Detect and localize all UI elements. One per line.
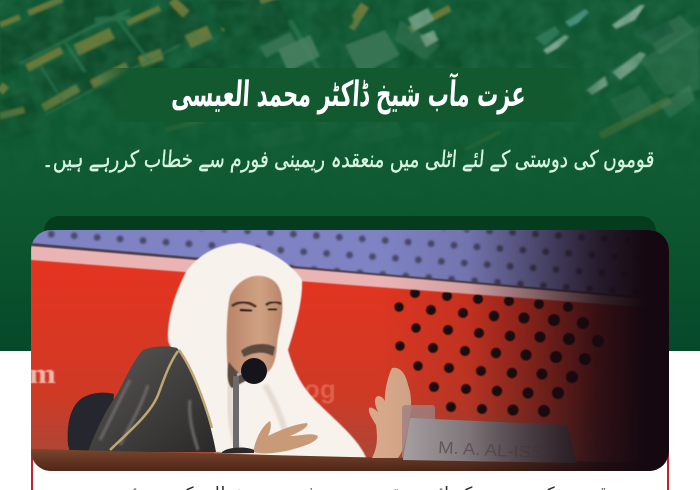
pink strip — [31, 245, 630, 305]
drinking glass — [402, 405, 435, 459]
chair — [68, 393, 114, 452]
title: عزت مآب شیخ ڈاکٹر محمد العیسی — [170, 72, 527, 114]
watermark letters: m — [29, 358, 56, 389]
roofs — [0, 0, 670, 150]
title banner backing — [100, 68, 600, 122]
green header background — [0, 0, 700, 351]
name plate — [403, 418, 577, 463]
roads — [20, 10, 330, 115]
face — [227, 276, 282, 378]
dark cloak — [88, 346, 216, 452]
mottled photo grain — [0, 0, 700, 130]
raised hand — [369, 368, 411, 458]
photo: speaker at forum: og — [304, 374, 336, 404]
moustache and beard — [228, 344, 275, 388]
shadow line above pink strip — [32, 242, 623, 296]
speaker's hand — [253, 421, 318, 453]
red frame lines of the text panel — [31, 440, 669, 490]
name plate: M. A. AL-ISSA — [438, 438, 557, 463]
scarf shadow folds — [230, 370, 290, 450]
dark vignette on right of photo — [380, 230, 669, 471]
black perforations — [394, 288, 604, 417]
blue perforated wall — [31, 230, 669, 294]
aerial city and harbour texture — [0, 0, 700, 151]
dark building blocks — [0, 0, 288, 122]
photo: speaker at forum — [29, 230, 669, 471]
desk — [31, 449, 669, 471]
cloak folds — [100, 380, 198, 450]
eyes — [232, 302, 281, 307]
boats — [535, 5, 675, 95]
white headscarf — [168, 243, 368, 462]
fade into plain green — [0, 90, 700, 220]
red backdrop — [31, 256, 669, 471]
pale port buildings — [259, 7, 700, 122]
microphone — [222, 358, 267, 453]
tree cover — [219, 16, 440, 46]
dark panel behind photo — [44, 216, 656, 256]
subtitle: قوموں کی دوستی کے لئے اٹلی میں منعقدہ ریمینی فورم سے خطاب کررہے ہیں۔ — [42, 146, 656, 173]
gold trim — [110, 350, 212, 450]
